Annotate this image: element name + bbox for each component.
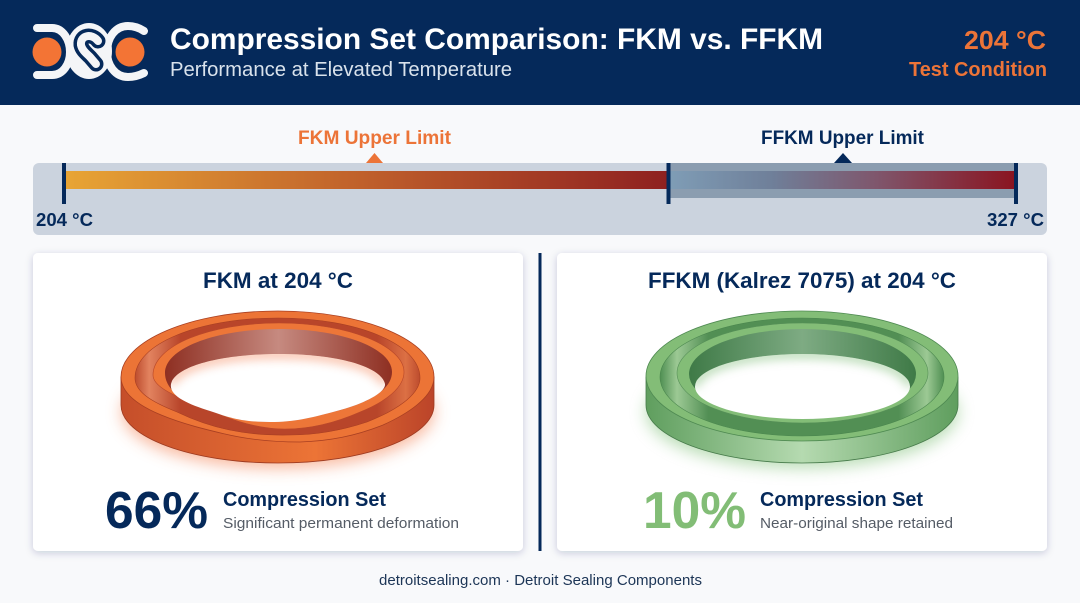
gauge track [33,163,1047,235]
title: Compression Set Comparison: FKM vs. FFKM [170,23,823,56]
tick: 327 [1014,163,1018,204]
heading: FFKM: FFKM (Kalrez 7075) at 204 °C [648,268,956,293]
FKM range bar [64,171,668,189]
label: FKM Upper Limit: FKM Upper Limit [298,128,452,149]
marker: FKM [366,153,383,163]
stat: 10%: 10% [643,482,746,540]
center divider [538,253,542,551]
label: 327 °C: 327 °C [987,210,1044,230]
label: FFKM Upper Limit: FFKM Upper Limit [761,128,925,149]
FFKM extended zone [669,163,1015,198]
seal ring: green [646,311,958,468]
card background [33,253,523,551]
stat: 66%: 66% [105,482,208,540]
test temperature: 204 °C [964,25,1046,55]
panel: FFKM [557,253,1047,551]
stat label: Compression Set [760,489,923,511]
icon: DSC logo [32,23,144,79]
header banner [0,0,1080,105]
panel: FKM [33,253,523,551]
card background [557,253,1047,551]
temperature range gauge [33,128,1047,235]
footer: detroitsealing.com · Detroit Sealing Components [379,572,702,589]
heading: FKM: FKM at 204 °C [203,268,353,293]
seal ring: deformed orange [121,311,434,468]
stat description: Significant permanent deformation [223,515,459,532]
tick: FKM limit [666,163,670,204]
FFKM range bar [669,171,1015,189]
tick: 204 [62,163,66,204]
test condition label: Test Condition [909,59,1047,81]
stat description: Near-original shape retained [760,515,953,532]
label: 204 °C: 204 °C [36,210,93,230]
stat label: Compression Set [223,489,386,511]
subtitle: Performance at Elevated Temperature [170,59,512,81]
marker: FFKM [834,153,852,163]
